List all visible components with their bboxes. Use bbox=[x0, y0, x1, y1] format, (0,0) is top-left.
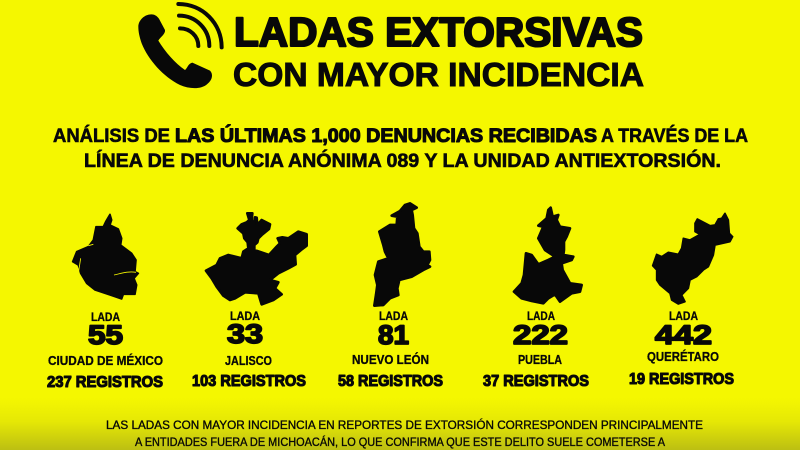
number: 55: 55 bbox=[88, 320, 123, 350]
label: LADA: LADA bbox=[91, 312, 120, 324]
state name: QUERÉTARO bbox=[647, 349, 719, 364]
map: Puebla bbox=[514, 208, 582, 303]
panel: Puebla bbox=[483, 208, 589, 390]
number: 442: 442 bbox=[655, 320, 712, 350]
number: 81: 81 bbox=[378, 320, 409, 350]
state name: JALISCO bbox=[225, 354, 272, 368]
subtitle text block: ANÁLISIS DE bbox=[53, 124, 170, 147]
map: Jalisco bbox=[206, 213, 307, 304]
label: LADA: LADA bbox=[379, 311, 408, 323]
state name: CIUDAD DE MÉXICO bbox=[48, 353, 163, 368]
bottom shaded band bbox=[0, 398, 800, 450]
records count: 19 REGISTROS bbox=[629, 371, 734, 388]
records count: 58 REGISTROS bbox=[338, 373, 443, 390]
map: Nuevo León bbox=[374, 203, 430, 306]
records count: 37 REGISTROS bbox=[483, 373, 589, 390]
subtitle text block: LAS ÚLTIMAS 1,000 DENUNCIAS RECIBIDAS bbox=[175, 123, 597, 147]
map: Querétaro bbox=[653, 213, 733, 304]
panel: Nuevo León bbox=[338, 203, 443, 390]
number: 33: 33 bbox=[227, 319, 263, 349]
title: LADAS EXTORSIVAS bbox=[234, 9, 643, 55]
map: Ciudad de México bbox=[73, 214, 138, 299]
label: LADA: LADA bbox=[527, 311, 555, 323]
panel: Jalisco bbox=[192, 213, 307, 390]
subtitle text block: LÍNEA DE DENUNCIA ANÓNIMA 089 Y LA UNIDAD ANTIEXTORSIÓN. bbox=[84, 148, 721, 172]
records count: 103 REGISTROS bbox=[192, 373, 306, 390]
icon: phone with signal waves bbox=[138, 4, 222, 88]
state name: NUEVO LEÓN bbox=[352, 352, 429, 367]
records count: 237 REGISTROS bbox=[47, 374, 163, 391]
title: CON MAYOR INCIDENCIA bbox=[233, 56, 644, 93]
panel: Ciudad de México bbox=[47, 214, 163, 391]
footer text block: LAS LADAS CON MAYOR INCIDENCIA EN REPORTES DE EXTORSIÓN CORRESPONDEN PRINCIPALMENTE bbox=[106, 417, 703, 432]
subtitle text block bbox=[53, 123, 748, 172]
label: LADA: LADA bbox=[669, 311, 698, 323]
label: LADA: LADA bbox=[230, 311, 260, 323]
footer text block: A ENTIDADES FUERA DE MICHOACÁN, LO QUE CONFIRMA QUE ESTE DELITO SUELE COMETERSE A bbox=[135, 434, 666, 449]
footer text block bbox=[106, 417, 703, 449]
panel: Querétaro bbox=[629, 213, 734, 388]
number: 222: 222 bbox=[513, 320, 568, 350]
subtitle text block: A TRAVÉS DE LA bbox=[601, 124, 748, 147]
title bbox=[233, 9, 644, 93]
state name: PUEBLA bbox=[518, 353, 562, 367]
